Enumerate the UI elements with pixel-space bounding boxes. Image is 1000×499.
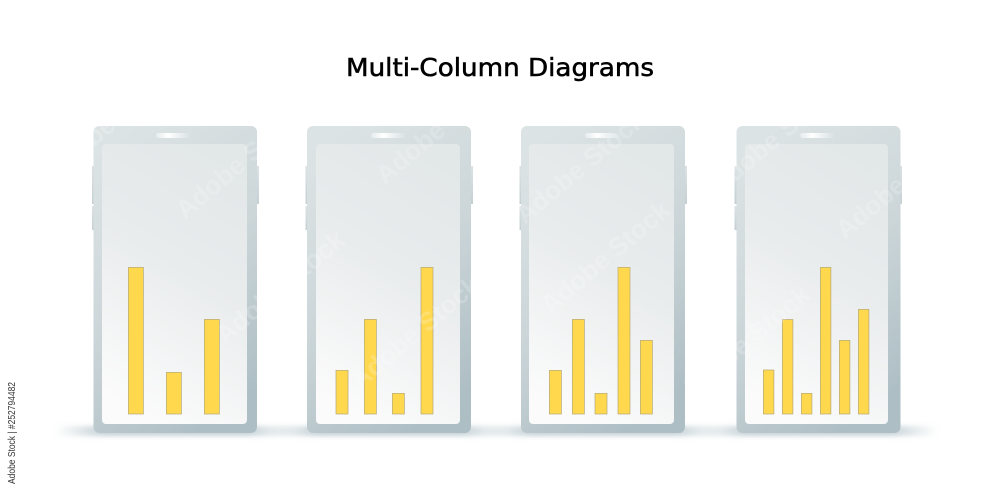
phone 3 side buttons: [520, 166, 687, 230]
watermark: Adobe Stock: [535, 194, 676, 320]
phone 1: [55, 126, 295, 436]
watermark: Adobe Stock: [210, 224, 351, 350]
phone 2 screen: [316, 144, 460, 424]
watermark: Adobe Stock: [510, 104, 651, 230]
phone 3: [483, 126, 723, 436]
watermark: Adobe Stock: [675, 279, 816, 405]
phone 3 screen: [529, 144, 674, 424]
phone 1 body: [94, 126, 257, 433]
phone 2 shadow: [269, 426, 509, 436]
phone 4 shadow: [698, 426, 938, 436]
title: Multi-Column Diagrams: [346, 53, 654, 82]
watermark: Adobe Stock: [170, 99, 311, 225]
watermark: [40, 59, 971, 405]
phone 3 body: [521, 126, 685, 433]
phone 1 screen: [102, 144, 247, 424]
watermark: Adobe Stock: [705, 74, 846, 200]
watermark: Adobe Stock: [345, 269, 486, 395]
phone 1 bar chart: [128, 267, 219, 414]
phone 2 side buttons: [306, 166, 473, 230]
phone 4 side buttons: [734, 166, 902, 230]
watermark: Adobe Stock: [830, 119, 971, 245]
phone 3 bar chart: [549, 267, 652, 414]
phone 4 body: [736, 126, 900, 433]
phone 1 side buttons: [92, 166, 259, 230]
stock credit: Adobe Stock | #252794482: [6, 382, 18, 484]
watermark: Adobe Stock: [370, 64, 511, 190]
phone 2 body: [307, 126, 471, 433]
phone 4 speaker: [800, 133, 835, 138]
phone 3 speaker: [585, 133, 620, 138]
phone 4: [698, 126, 938, 436]
phone 4 screen: [745, 144, 888, 424]
phone 1 speaker: [156, 133, 191, 138]
phone 2: [269, 126, 509, 436]
phone 2 bar chart: [336, 267, 433, 414]
watermark: Adobe Stock: [40, 59, 181, 185]
phone 4 bar chart: [763, 267, 869, 414]
phone 1 shadow: [55, 426, 295, 436]
phone 3 shadow: [483, 426, 723, 436]
phone 2 speaker: [371, 133, 406, 138]
